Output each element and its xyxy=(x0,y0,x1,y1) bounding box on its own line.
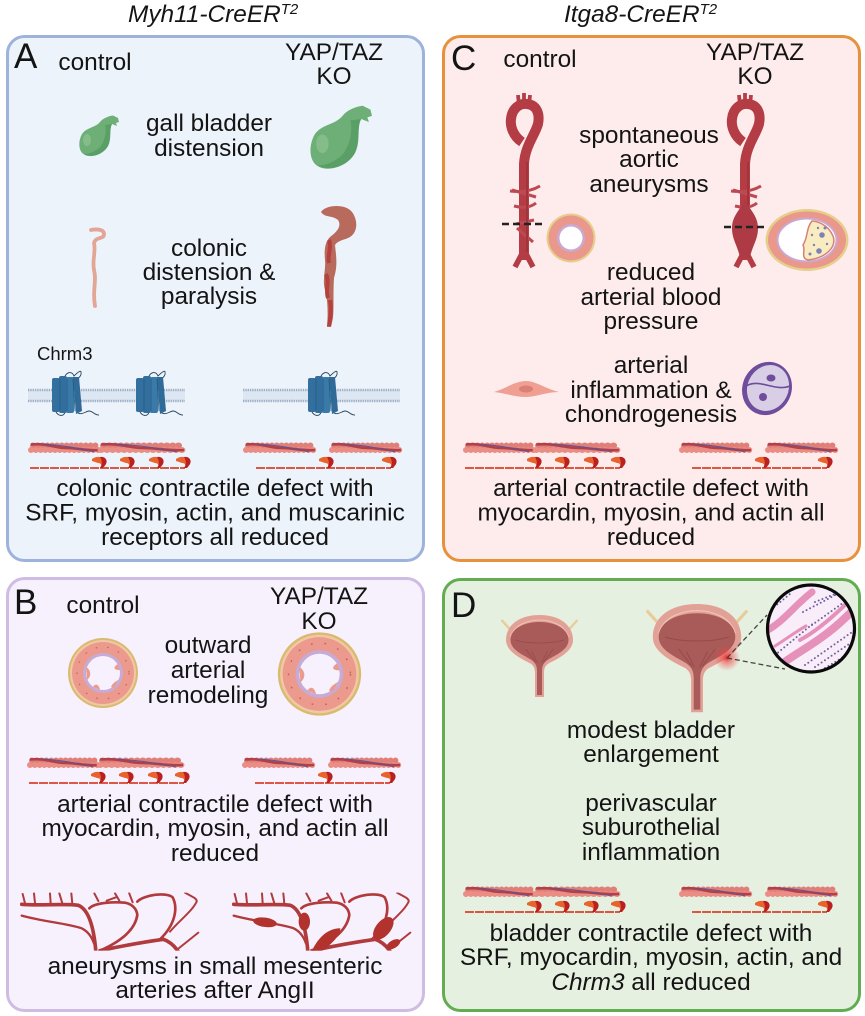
text: colonic distension and paralysis xyxy=(143,235,275,310)
icon: histology micrograph xyxy=(766,584,856,673)
icon: control gall bladder xyxy=(79,116,119,156)
text: arterial inflammation and chondrogenesis: inflammation & xyxy=(570,377,732,404)
label: Chrm3: Chrm3 xyxy=(37,343,93,364)
icon: KO actin and myosin filaments xyxy=(246,444,402,468)
label: YAP/TAZ KO xyxy=(285,39,383,90)
icon: KO aorta cross section with plaque xyxy=(766,209,848,271)
icon: KO colon xyxy=(321,206,356,327)
panel letter A: A xyxy=(14,37,38,76)
text: colonic contractile defect: SRF, myosin, actin, and muscarinic xyxy=(25,500,405,526)
icon: control actin and myosin filaments xyxy=(29,759,190,783)
icon: KO membrane with one receptor xyxy=(243,371,400,415)
icon: control actin and myosin filaments xyxy=(30,444,191,468)
panel C: aorta xyxy=(444,36,860,560)
text: arterial contractile defect: reduced xyxy=(171,840,259,867)
text: colonic distension and paralysis: paralysis xyxy=(161,283,257,310)
icon: KO actin and myosin filaments xyxy=(682,888,838,912)
icon: control artery cross section xyxy=(68,638,138,708)
text: colonic distension and paralysis: colonic xyxy=(171,235,247,262)
text: gall bladder distension xyxy=(146,110,272,162)
text: modest bladder enlargement: modest bladder xyxy=(567,717,735,744)
text: arterial contractile defect: myocardin, myosin, and actin all xyxy=(477,500,825,526)
text: bladder contractile defect xyxy=(460,920,842,996)
title: Itga8-CreER T2: Itga8-CreER xyxy=(564,1,700,28)
icon: KO gall bladder xyxy=(310,106,372,169)
panel B: arteries xyxy=(8,578,424,1010)
icon: smooth muscle cell xyxy=(494,381,559,397)
text: aneurysms in small mesenteric arteries: aneurysms in small mesenteric xyxy=(48,953,382,980)
label: YAP/TAZ KO: YAP/TAZ xyxy=(270,583,368,610)
text: aneurysms in small mesenteric arteries: arteries after AngII xyxy=(115,977,315,1004)
label: control: control xyxy=(66,592,140,619)
text: colonic distension and paralysis: distension & xyxy=(143,259,275,286)
label: control: control xyxy=(58,49,132,76)
text: bladder contractile defect: bladder contractile defect with xyxy=(490,920,812,947)
icon: control membrane with two receptors xyxy=(28,371,185,415)
text: gall bladder distension: gall bladder xyxy=(146,110,272,137)
text: spontaneous aortic aneurysms: aortic xyxy=(619,146,679,173)
icon: control aorta xyxy=(510,93,540,267)
label: control: control xyxy=(503,46,577,73)
text: spontaneous aortic aneurysms: spontaneous xyxy=(579,122,719,149)
icon: KO dashed section line xyxy=(724,226,767,228)
panel letter B: B xyxy=(14,583,37,622)
icon: control dashed section line xyxy=(502,223,544,225)
text: arterial contractile defect: arterial contractile defect with xyxy=(493,475,809,502)
text: reduced arterial blood pressure: pressure xyxy=(604,308,698,335)
label: YAP/TAZ KO: KO xyxy=(301,608,337,635)
icon: KO actin and myosin filaments xyxy=(682,444,838,468)
icon: KO artery cross section xyxy=(278,632,361,716)
text: outward arterial remodeling: arterial xyxy=(171,657,245,684)
icon: inflammation spot xyxy=(714,645,740,671)
text: arterial contractile defect: arterial contractile defect with xyxy=(57,791,373,818)
panel D: bladder xyxy=(444,580,860,1010)
icon: control actin and myosin filaments xyxy=(465,888,626,912)
icon: control mesenteric arteries xyxy=(22,893,198,953)
text: spontaneous aortic aneurysms xyxy=(579,122,719,198)
title: Myh11-CreER T2: T2 xyxy=(281,1,299,18)
label: YAP/TAZ KO xyxy=(270,583,368,635)
text: outward arterial remodeling: outward xyxy=(165,632,251,659)
text: colonic contractile defect: colonic contractile defect with xyxy=(56,475,374,502)
text: modest bladder enlargement xyxy=(567,717,735,768)
text: bladder contractile defect: Chrm3 all reduced xyxy=(551,969,751,996)
icon: control bladder xyxy=(502,615,578,697)
icon: chondrocytes xyxy=(733,354,801,423)
text: modest bladder enlargement: enlargement xyxy=(583,741,719,768)
text: arterial inflammation and chondrogenesis xyxy=(565,352,737,428)
icon: control actin and myosin filaments xyxy=(465,444,626,468)
icon: KO aorta with aneurysm xyxy=(731,93,761,267)
icon: KO bladder xyxy=(647,604,747,712)
text: arterial inflammation and chondrogenesis: chondrogenesis xyxy=(565,401,737,428)
panel letter D: D xyxy=(451,586,476,625)
text: reduced arterial blood pressure: arterial blood xyxy=(580,284,722,311)
icon: control colon xyxy=(91,229,104,306)
icon: zoom dashed lines xyxy=(727,615,785,669)
text: arterial contractile defect xyxy=(41,791,389,867)
text: arterial contractile defect xyxy=(477,475,825,551)
panel letter C: C xyxy=(451,39,476,78)
panel A: colon and gall bladder xyxy=(8,36,424,560)
label: YAP/TAZ KO xyxy=(706,39,804,90)
text: perivascular suburothelial inflammation: perivascular xyxy=(585,790,717,817)
icon: KO actin and myosin filaments xyxy=(245,759,401,783)
text: outward arterial remodeling xyxy=(148,632,268,709)
text: spontaneous aortic aneurysms: aneurysms xyxy=(589,171,709,198)
label: YAP/TAZ KO: YAP/TAZ xyxy=(285,39,383,66)
icon: KO mesenteric arteries with aneurysms xyxy=(234,893,410,953)
text: gall bladder distension: distension xyxy=(154,135,264,162)
text: arterial contractile defect: reduced xyxy=(607,524,695,551)
text: reduced arterial blood pressure: reduced xyxy=(607,259,695,286)
label: YAP/TAZ KO: KO xyxy=(316,63,352,90)
icon: control aorta cross section xyxy=(546,214,596,262)
text: outward arterial remodeling: remodeling xyxy=(148,682,268,709)
text: perivascular suburothelial inflammation xyxy=(582,790,720,866)
text: bladder contractile defect: SRF, myocardin, myosin, actin, and xyxy=(460,944,842,971)
label: YAP/TAZ KO: KO xyxy=(737,63,773,90)
text: colonic contractile defect: receptors all reduced xyxy=(101,524,329,551)
text: aneurysms in small mesenteric arteries xyxy=(48,953,382,1004)
text: arterial contractile defect: myocardin, myosin, and actin all xyxy=(41,815,389,842)
label: YAP/TAZ KO: YAP/TAZ xyxy=(706,39,804,66)
title: Itga8-CreER T2: T2 xyxy=(700,1,718,18)
title: Myh11-CreER T2: Myh11-CreER xyxy=(128,1,281,28)
text: arterial inflammation and chondrogenesis: arterial xyxy=(614,352,688,379)
text: reduced arterial blood pressure xyxy=(580,259,722,335)
text: perivascular suburothelial inflammation: inflammation xyxy=(582,839,720,866)
text: perivascular suburothelial inflammation: suburothelial xyxy=(582,814,720,841)
text: colonic contractile defect xyxy=(25,475,405,551)
